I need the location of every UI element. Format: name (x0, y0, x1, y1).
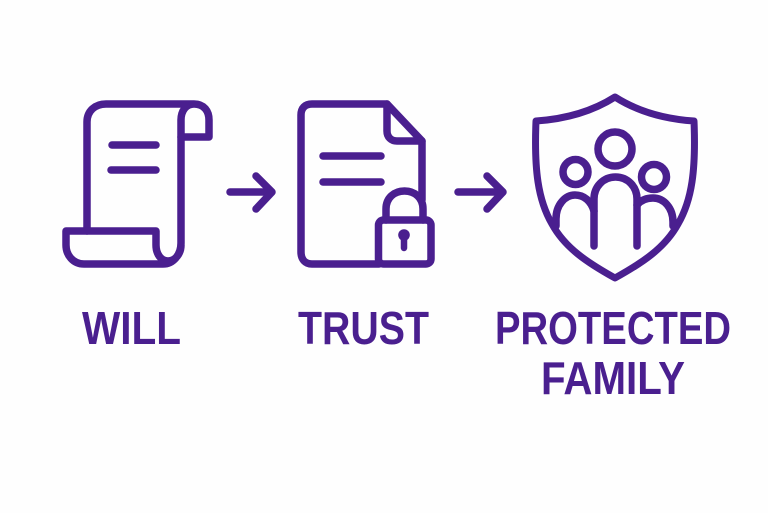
icon: will scroll (66, 104, 209, 264)
family bodies (556, 177, 673, 246)
label: protected family (495, 302, 731, 404)
icon: shield with family (536, 97, 694, 278)
label: will: WILL (82, 302, 181, 354)
icon: padlock (378, 191, 431, 264)
arrow: trust to protected family (458, 176, 503, 209)
shield outline (536, 97, 694, 278)
label: protected family: FAMILY (541, 352, 685, 404)
label: trust: TRUST (298, 302, 429, 354)
arrow: will to trust (230, 176, 272, 209)
icon: trust document with padlock (301, 104, 431, 264)
family heads (563, 132, 666, 190)
